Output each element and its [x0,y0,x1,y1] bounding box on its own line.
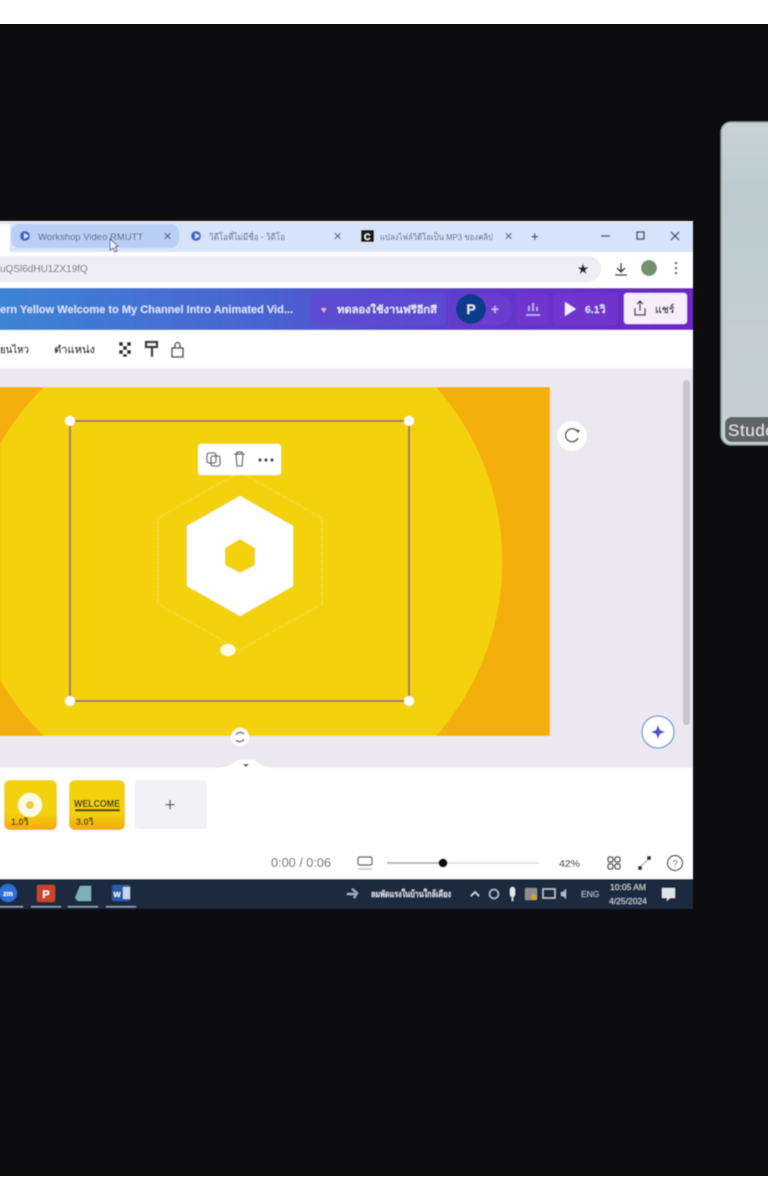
zoom percent: 42% [559,858,581,870]
app: Zoom [0,884,23,908]
editor toolbar: ยนไหว [0,343,29,356]
address bar: uQSl6dHU1ZX19fQ [0,264,88,275]
tab: MP3 converter: ✕ [504,231,513,243]
zoom slider [387,858,539,868]
trial button: ♥ [321,305,327,316]
icon: more [258,458,274,462]
tab: Workshop Video: ✕ [163,231,172,243]
icon: lock [172,342,183,357]
system tray [471,887,599,901]
icon: duplicate [207,453,220,466]
page thumbnail 2: WELCOME [74,799,120,810]
play duration button [553,293,618,325]
tab: MP3 converter [361,230,513,243]
clock [609,882,647,906]
icon: rotate handle [231,728,249,746]
panel: shared browser window [0,221,693,909]
Canva header bar: ern Yellow Welcome to My Channel Intro Animated Vid... [0,304,293,316]
editor workspace [0,368,693,768]
Canva header bar [0,288,693,330]
white dot [220,644,236,656]
icon: profile avatar [641,260,657,276]
mouse cursor [110,239,118,252]
page thumbnail 2: 3.0วิ [76,817,94,827]
playback time: 0:00 / 0:06 [271,856,331,870]
bottom timeline panel [0,760,693,879]
clock: 10:05 AM [610,882,646,892]
icon: grid view [608,857,620,869]
icon: help [668,856,682,870]
Windows taskbar [0,879,693,909]
icon: browser menu [675,262,677,274]
new tab button: + [531,229,539,244]
browser tab bar [0,222,693,252]
share button [624,293,687,324]
app: Word: w [112,889,121,899]
icon: chart [517,293,549,325]
weather widget [347,888,451,899]
collapse tab [217,760,275,768]
scrollbar [683,380,690,725]
share button: แชร์ [655,303,675,316]
play duration button: 6.1วิ [585,304,606,316]
app: Word [106,885,136,908]
avatar P [456,294,512,325]
panel: design canvas [0,387,550,736]
tab: untitled video [191,230,342,243]
avatar P: + [491,301,499,317]
icon: download [615,263,627,275]
icon: transparency [119,342,131,357]
icon: magic assistant button [642,716,674,748]
icon: comment add button [557,421,587,451]
add page button: + [164,795,176,816]
page thumbnail 1: 1.0วิ [11,817,29,827]
icon: fullscreen [638,856,651,870]
icon: trash [234,452,245,466]
window controls [601,232,679,240]
dashed outer hexagon [158,472,322,650]
page thumbnail 1 [4,780,57,830]
tab: Workshop Video: Workshop Video RMUTT [38,232,143,243]
add page button [135,780,207,829]
app: Zoom: zm [3,891,13,898]
avatar P: P [466,301,476,317]
panel: student video tile [721,122,768,445]
app: notes [68,886,98,908]
icon: notifications [662,888,675,901]
editor toolbar [0,330,693,368]
tab: untitled video: วิดีโอที่ไม่มีชื่อ - วิดีโอ [209,230,285,242]
clock: 4/25/2024 [609,896,647,906]
icon: help: ? [672,859,678,870]
tab: Workshop Video [11,224,179,248]
floating element toolbar [198,444,281,475]
app: PowerPoint: P [42,889,50,901]
page thumbnail 2 [69,780,125,830]
icon: bookmark star: ★ [577,262,589,276]
selection box [65,416,414,706]
tab: untitled video: ✕ [333,231,342,243]
app: PowerPoint [31,885,61,908]
editor toolbar: ตำแหน่ง [54,344,95,356]
trial button [311,293,446,325]
system tray: ENG [581,889,599,899]
yellow circle [0,387,502,736]
white hexagon with inner hole [187,496,293,616]
icon: notes [358,857,372,869]
address bar [0,256,677,282]
tab: MP3 converter: C [364,232,371,242]
trial button: ทดลองใช้งานฟรีอีกสี [337,303,438,316]
weather widget: ลมพัดแรงในบ้านใกล้เคียง [371,888,451,899]
icon: paint roller [146,342,157,357]
tab: MP3 converter: แปลงไฟล์วิดีโอเป็น MP3 ของคลิป [380,231,493,242]
